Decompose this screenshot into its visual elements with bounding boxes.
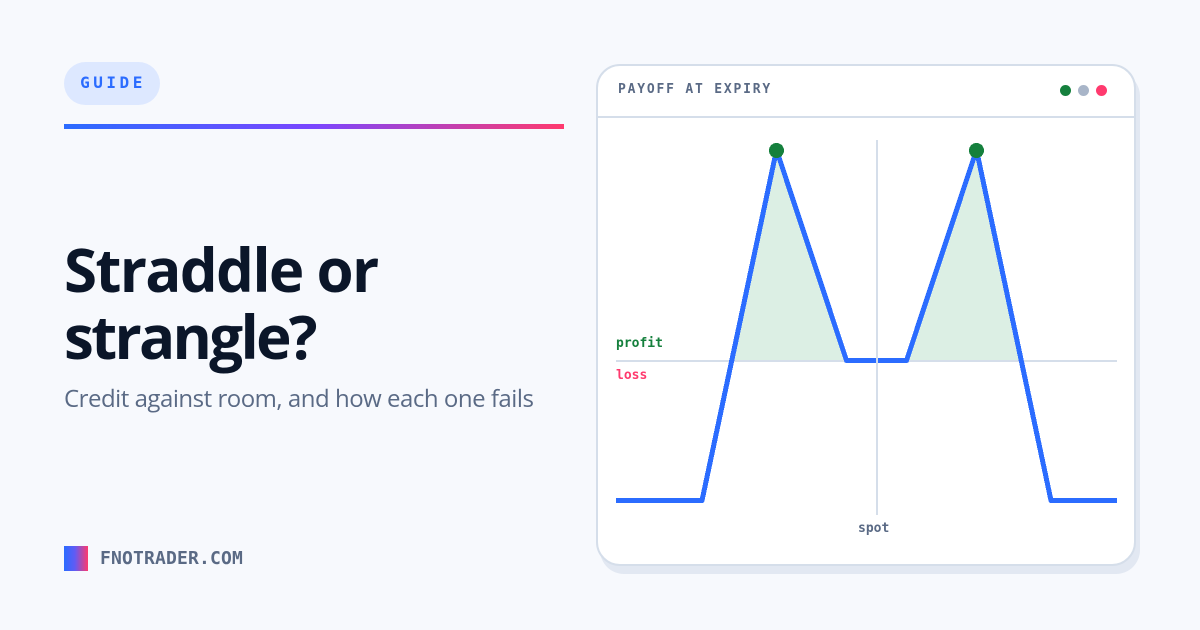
- brand logo square: [64, 546, 88, 571]
- profit zones: [732, 150, 1022, 361]
- spot label: spot: [858, 521, 889, 536]
- profit label: profit: [616, 336, 663, 351]
- title: strangle?: [64, 295, 315, 377]
- badge: GUIDE: GUIDE: [80, 73, 146, 92]
- subtitle: Credit against room, and how each one fails: [64, 382, 533, 415]
- spot line: [876, 140, 878, 515]
- badge: GUIDE: [64, 62, 160, 105]
- zero line: [616, 360, 1117, 362]
- header divider: [598, 116, 1134, 118]
- title: [64, 228, 378, 377]
- card heading: PAYOFF AT EXPIRY: [618, 82, 772, 97]
- status dots: [1060, 85, 1107, 96]
- payoff line: [616, 150, 1117, 500]
- brand name: FNOTRADER.COM: [100, 548, 243, 569]
- accent gradient rule: [64, 124, 564, 129]
- peak markers: [769, 143, 984, 158]
- title: Straddle or: [64, 228, 378, 310]
- panel: payoff card: [596, 64, 1136, 566]
- loss label: loss: [616, 368, 647, 383]
